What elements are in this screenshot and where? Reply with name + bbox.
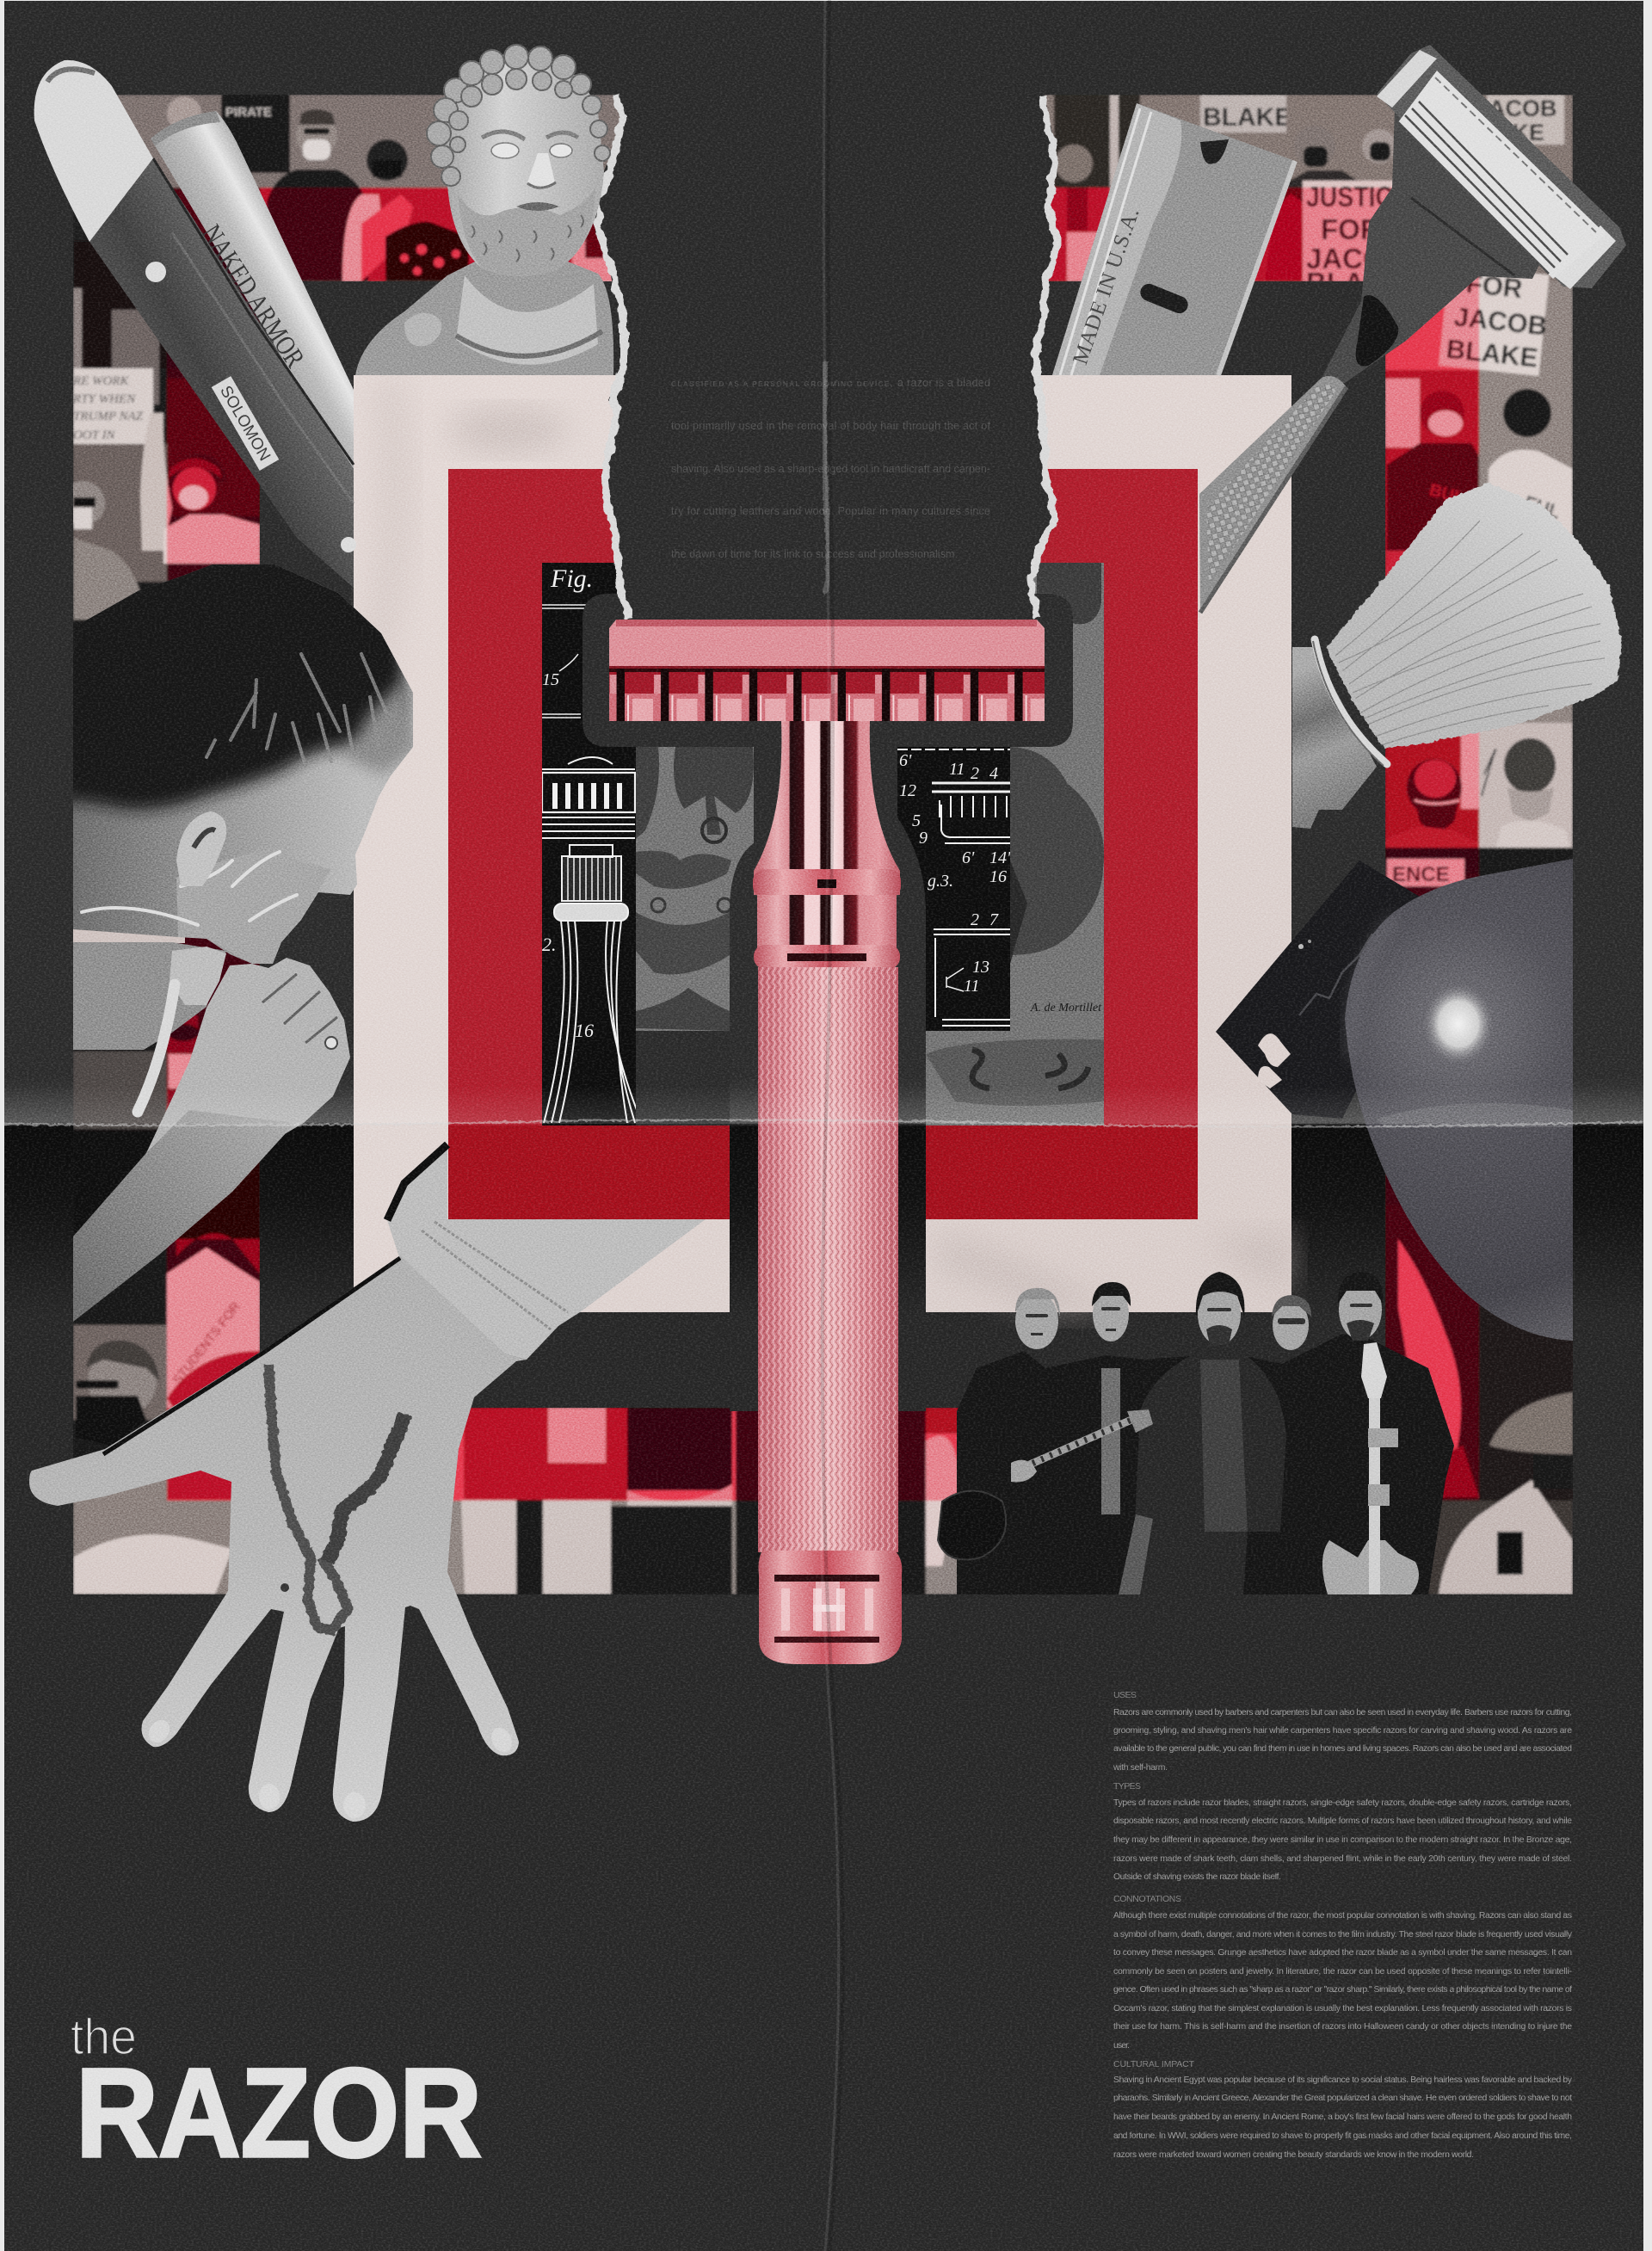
man shaving xyxy=(52,551,430,1322)
section: types: TYPES xyxy=(1113,1781,1141,1792)
blurred hair mass xyxy=(52,551,404,810)
section: cultural impact xyxy=(1113,2059,1573,2160)
section: cultural impact: CULTURAL IMPACT xyxy=(1113,2059,1195,2069)
head xyxy=(441,53,604,276)
photo: left column protesters: TRUMP NAZ xyxy=(73,410,144,423)
section: uses: Razors are commonly used by barbers and carpenters but can also be seen used in everyday life. Barbers use razors for cutting, xyxy=(1113,1708,1572,1718)
cartridge head xyxy=(1377,45,1626,289)
brush bristles xyxy=(1327,483,1622,749)
photo: lower-right protesters xyxy=(1385,1205,1573,1594)
sign: ACOB AKE top: ACOB xyxy=(1489,96,1557,121)
patent drawing: left razor: 15 xyxy=(542,670,559,689)
torn edge right xyxy=(1030,96,1058,618)
photo: lower-left protesters: STUDENTS FOR xyxy=(170,1299,243,1387)
patent drawing: left razor: Fig. xyxy=(550,564,593,593)
section: cultural impact: pharaohs. Similarly in Ancient Greece, Alexander the Great popularized a clean shave. He even ordered soldiers to shave to not xyxy=(1113,2094,1572,2103)
title xyxy=(71,2009,482,2184)
photo: top-left protesters: PIRATE xyxy=(225,105,272,120)
sign: FOR JACOB BLAKE: FOR xyxy=(1464,268,1524,304)
cartridge handle xyxy=(1322,108,1543,383)
razor knurled handle xyxy=(758,967,898,1552)
intro paragraph: shaving. Also used as a sharp-edged tool in handicraft and carpen- xyxy=(671,463,990,475)
section: connotations: Although there exist multiple connotations of the razor, the most popular connotation is with shaving. Razors can also stand as xyxy=(1113,1911,1572,1921)
razor handle xyxy=(89,158,354,588)
patent drawing: right razor: 6' xyxy=(962,848,975,867)
patent drawing: right razor: 12 xyxy=(899,781,916,800)
patent drawing: left razor: 2. xyxy=(542,934,556,955)
sign: FOR JACOB BLAKE: BLAKE xyxy=(1445,334,1539,373)
patent drawing: right razor: g.3. xyxy=(928,872,953,891)
article text column xyxy=(1113,1690,1573,2160)
straight razor xyxy=(34,60,356,588)
red duotone ring xyxy=(167,188,1479,1501)
sign: ACOB AKE top: AKE xyxy=(1495,120,1544,145)
section: connotations: gence. Often used in phrases such as "sharp as a razor" or "razor sharp." Similarly, there exists a philosophical tool by the name of xyxy=(1113,1985,1572,1995)
safety razor xyxy=(609,620,1045,1664)
sign: FOR JACOB BLAKE xyxy=(1439,264,1552,376)
sign: JUSTICE FOR JACOB BLAKE: FOR xyxy=(1321,213,1381,245)
patent drawing: left razor xyxy=(542,564,642,1123)
sign: JUSTICE FOR JACOB BLAKE: JUSTICE xyxy=(1306,181,1409,213)
sign: JUSTICE FOR JACOB BLAKE xyxy=(1303,181,1409,299)
shaving cream xyxy=(82,848,331,964)
intro paragraph: CLASSIFIED AS A PERSONAL GROOMING DEVICE, xyxy=(671,379,892,388)
section: uses xyxy=(1113,1690,1572,1773)
hair curls xyxy=(427,45,610,186)
section: types: Outside of shaving exists the razor blade itself. xyxy=(1113,1872,1281,1882)
intro paragraph: a razor is a bladed xyxy=(897,377,990,389)
torn edge left xyxy=(596,95,629,620)
photo: top-right protesters xyxy=(1037,95,1573,299)
patent drawing: right razor: 11 xyxy=(949,760,965,779)
pale strip behind neck xyxy=(73,929,185,943)
engravings: gray plate right: A. de Mortillet xyxy=(1030,1002,1102,1014)
shaving razor in hand xyxy=(138,984,175,1112)
razor halo cut-out xyxy=(583,594,1073,1411)
supporting arm xyxy=(73,942,226,1050)
cut hand xyxy=(29,1144,706,1822)
band facial features xyxy=(1026,1304,1374,1345)
sign: JUSTICE FOR JACOB BLAKE: JACOB xyxy=(1306,243,1406,274)
section: connotations: to convey these messages. Grunge aesthetics have adopted the razor blade as a symbol under the same messages. It can xyxy=(1113,1948,1572,1958)
sign: ACOB AKE top xyxy=(1487,95,1564,145)
band hair xyxy=(1015,1272,1383,1317)
icon: marble statue bust xyxy=(355,45,613,375)
cartridge razor xyxy=(1199,45,1626,613)
patent drawing: right razor: 13 xyxy=(972,958,989,977)
protest photo ring xyxy=(60,95,1573,1594)
patent drawing: right razor: 14' xyxy=(989,848,1011,867)
section: cultural impact: and fortune. In WWI, soldiers were required to shave to properly fit gas masks and other facial equipment. Also around this time, xyxy=(1113,2131,1572,2141)
photo: left column protesters: RTY WHEN xyxy=(72,392,136,406)
double-edge razor blade xyxy=(1216,860,1446,1119)
bust shoulders xyxy=(355,258,613,375)
section: connotations: Occam's razor, stating that the simplest explanation is usually the best explanation. Less frequently associated with razors is xyxy=(1113,2004,1572,2014)
brush handle xyxy=(1292,647,1377,829)
engravings: gray plate left xyxy=(636,747,756,1126)
intro paragraph: tool primarily used in the removal of body hair through the act of xyxy=(671,420,991,432)
patent drawing: right razor: 9 xyxy=(919,829,928,848)
finger shading xyxy=(145,1716,515,1818)
sign: FOR JACOB BLAKE: JACOB xyxy=(1452,301,1549,342)
band photo xyxy=(938,1272,1454,1594)
section: types: disposable razors, and most recently electric razors. Multiple forms of razors have been utilized throughout history, and while xyxy=(1113,1816,1572,1826)
photo: left column protesters: RE WORK xyxy=(72,374,130,388)
bass xyxy=(1322,1342,1419,1594)
photo: bottom-centre legs xyxy=(417,1408,736,1594)
razor tip xyxy=(34,60,153,242)
section: connotations: their use for harm. This is self-harm and the insertion of razors into Halloween candy or other objects intending to injure the xyxy=(1113,2022,1572,2032)
section: cultural impact: Shaving in Ancient Egypt was popular because of its significance to social status. Being hairless was favorable and backed by xyxy=(1113,2075,1573,2085)
photo: right column protesters: FUL xyxy=(1521,491,1563,523)
beard xyxy=(458,188,595,276)
photo: right column protesters: BULLS xyxy=(1427,481,1488,514)
section: cultural impact: have their beards grabbed by an enemy. In Ancient Rome, a boy's first few facial hairs were offered to the gods for good health xyxy=(1113,2112,1572,2122)
section: connotations: a symbol of harm, death, danger, and more when it comes to the film industry. The steel razor blade is frequently used visually xyxy=(1113,1930,1573,1940)
cartridge grip xyxy=(1199,376,1347,613)
section: connotations: CONNOTATIONS xyxy=(1113,1894,1181,1904)
patent drawing: right razor: 16 xyxy=(989,867,1007,886)
patent drawing: left razor: 16 xyxy=(575,1020,594,1041)
photo: right column protesters xyxy=(1385,264,1573,886)
section: cultural impact: razors were marketed toward women creating the beauty standards we know in the modern world. xyxy=(1113,2150,1474,2160)
fist xyxy=(146,958,350,1153)
section: connotations: commonly be seen on posters and jewelry. In literature, the razor can be used opposite of these meanings to refer tointelli- xyxy=(1113,1967,1572,1977)
band bodies xyxy=(957,1334,1454,1594)
photo: lower-left protesters xyxy=(73,1015,260,1594)
photo: left column protesters xyxy=(60,241,260,620)
intro paragraph: try for cutting leathers and wood. Popular in many cultures since xyxy=(671,505,990,517)
patent drawing: right razor: 4 xyxy=(989,764,998,783)
red square frame xyxy=(448,469,1198,1219)
razor end cap xyxy=(759,1551,902,1664)
razor upper collar xyxy=(753,869,901,898)
photo: masked boy xyxy=(1385,723,1479,860)
apple xyxy=(1345,859,1573,1341)
shaving brush xyxy=(1292,483,1622,829)
intro paragraph: the dawn of time for its link to success and professionalism. xyxy=(671,548,958,560)
photo: masked girl xyxy=(1479,723,1573,860)
head xyxy=(52,551,430,972)
section: connotations: user. xyxy=(1113,2041,1130,2051)
section: types: Types of razors include razor blades, straight razors, single-edge safety razors, double-edge safety razors, cartridge razors, xyxy=(1113,1798,1572,1808)
intro paragraph xyxy=(671,377,991,560)
razor engraving: NAKED ARMOR xyxy=(196,219,311,373)
patent drawing: right razor: 6' xyxy=(899,751,912,770)
patent drawing: right razor: 2 xyxy=(971,910,979,929)
single-edge razor blade xyxy=(1052,103,1295,375)
razor neck xyxy=(754,721,900,895)
torn paper centre xyxy=(593,1,1060,621)
photo: bottom-right left edge xyxy=(926,1408,995,1594)
razor comb xyxy=(609,668,1045,721)
forearm xyxy=(73,1110,295,1322)
section: uses: grooming, styling, and shaving men's hair while carpenters have specific razors for carving and shaving wood. As razors are xyxy=(1113,1726,1572,1736)
inner panel: patent drawings and engravings xyxy=(542,563,1104,1126)
razor label: SOLOMON xyxy=(216,383,274,465)
ear xyxy=(176,811,226,886)
sign: JUSTICE FOR JACOB BLAKE: BLAKE xyxy=(1306,267,1404,299)
patent drawing: right razor: 7 xyxy=(989,910,999,929)
patent drawing: right razor: 11 xyxy=(964,977,980,996)
section: uses: available to the general public, you can find them in use in homes and living spaces. Razors can also be used and are associated xyxy=(1113,1744,1572,1754)
engravings: gray plate right xyxy=(926,563,1104,1126)
band faces xyxy=(1015,1280,1382,1350)
sleeve xyxy=(387,1144,706,1360)
title: the: the xyxy=(71,2009,137,2065)
razor lower collar xyxy=(754,945,900,969)
razor blade spine xyxy=(151,111,354,469)
section: types xyxy=(1113,1781,1572,1882)
hand xyxy=(29,1255,527,1822)
brush ring xyxy=(1315,639,1387,764)
title: RAZOR: RAZOR xyxy=(76,2043,482,2184)
photo: top-left protesters xyxy=(73,95,624,282)
photo: right column protesters: ENCE xyxy=(1392,863,1450,886)
cream cloth panel xyxy=(354,375,1291,1312)
guitar xyxy=(938,1409,1153,1559)
patent drawing: right razor: 5 xyxy=(912,811,921,830)
patent drawing: right razor: 2 xyxy=(971,764,979,783)
razor head cap xyxy=(609,620,1045,668)
section: connotations xyxy=(1113,1894,1573,2051)
sign: BLAKE top: BLAKE xyxy=(1203,103,1291,132)
patent drawing: right razor xyxy=(897,749,1011,1026)
section: types: razors were made of shark teeth, clam shells, and sharpened flint, while in the early 20th century, they were made of steel. xyxy=(1113,1854,1572,1864)
single-edge razor blade: MADE IN U.S.A. xyxy=(1069,206,1144,367)
section: uses: USES xyxy=(1113,1690,1137,1700)
razor barrel xyxy=(757,895,897,948)
blood trail xyxy=(268,1364,405,1631)
band jackets xyxy=(1131,1351,1286,1594)
section: types: they may be different in appearance, they were similar in use in comparison to the modern straight razor. In the Bronze age, xyxy=(1113,1835,1572,1845)
photo: left column protesters: OOT IN xyxy=(73,429,115,442)
section: uses: with self-harm. xyxy=(1113,1763,1168,1773)
statue eyes and nose xyxy=(482,132,525,139)
